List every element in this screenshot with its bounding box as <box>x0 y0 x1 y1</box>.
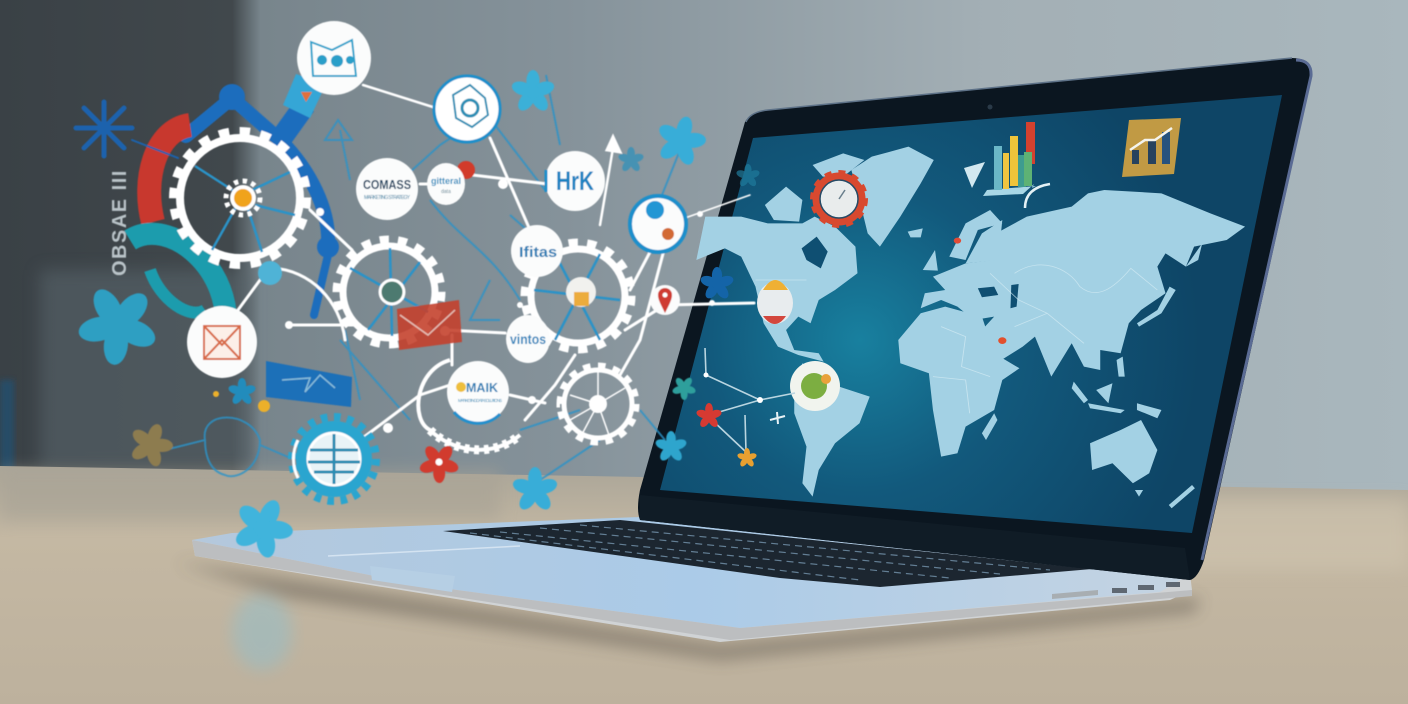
starburst gear <box>560 366 636 442</box>
New Zealand <box>1169 485 1195 508</box>
Scandinavia <box>949 210 1002 260</box>
envelope node <box>187 306 257 378</box>
small text node: data <box>441 189 451 195</box>
MAIK node: MAIK <box>466 380 499 395</box>
Black and Caspian seas <box>978 287 998 297</box>
white connector lines <box>238 85 754 440</box>
HrK node: HrK <box>556 166 594 196</box>
gold chart tile <box>1122 118 1181 177</box>
node near gear <box>258 261 282 285</box>
red node flower <box>695 403 723 429</box>
sun icon <box>226 181 260 215</box>
Eurasia <box>921 190 1245 377</box>
red flower <box>411 435 468 491</box>
world map <box>696 147 1245 508</box>
bar chart on screen <box>964 122 1050 208</box>
tan flower <box>122 416 180 473</box>
teal shape <box>130 234 226 335</box>
side ports <box>1052 582 1180 599</box>
North America <box>696 217 857 362</box>
Ifitas node <box>511 225 563 277</box>
Japan <box>1137 287 1176 327</box>
vintos node <box>506 315 550 363</box>
MAIK node: MARKETING DATA SOLUTIONS <box>458 398 502 403</box>
pin node <box>650 285 680 315</box>
dark blue arm with joints <box>186 91 332 315</box>
screen lid <box>638 58 1312 580</box>
keyboard-side flower <box>222 488 304 568</box>
borders <box>755 265 1157 413</box>
rotated wall text: OBSAE III <box>109 169 131 276</box>
small outline flower on screen <box>735 164 761 188</box>
hinge strip <box>640 495 1190 580</box>
wooden table <box>0 466 1408 704</box>
red map markers <box>954 238 961 244</box>
Africa <box>898 307 1019 457</box>
trackpad line <box>328 546 520 556</box>
Greenland <box>851 147 934 247</box>
MAIK node <box>447 361 509 423</box>
Arctic islands <box>765 187 802 222</box>
webcam <box>988 104 992 110</box>
screen network nodes <box>704 348 795 452</box>
medium left gear <box>337 240 441 344</box>
faint blue connector lines <box>165 75 680 480</box>
small white joints <box>285 179 715 433</box>
red card <box>397 300 462 350</box>
red clock gear on map <box>813 173 865 225</box>
rose emblem node <box>434 76 500 142</box>
dark blue flower on screen <box>699 267 735 301</box>
blue card <box>266 361 352 407</box>
Ifitas node: Ifitas <box>519 244 557 261</box>
Kamchatka <box>1186 243 1202 267</box>
background wall <box>0 0 1408 500</box>
Southeast Asia islands <box>1072 382 1088 403</box>
blue node flower <box>227 378 257 406</box>
medium right gear <box>525 243 631 349</box>
plane icon <box>770 412 785 424</box>
flower upper right <box>649 110 713 172</box>
screen <box>660 95 1282 533</box>
yellow dots <box>258 400 270 412</box>
Britain <box>923 250 938 271</box>
South America <box>794 363 870 497</box>
vintos node: vintos <box>510 331 546 347</box>
flag badge on map <box>757 280 793 324</box>
COMASS node: MARKETING STRATEGY <box>364 195 411 201</box>
flower top <box>510 70 556 114</box>
light blue bar with marker <box>283 74 326 118</box>
globe gear <box>292 417 376 501</box>
right teal flower <box>654 431 688 463</box>
small text node <box>427 163 465 205</box>
COMASS node: COMASS <box>363 177 411 192</box>
orange node star <box>737 448 757 468</box>
green badge on map <box>790 361 840 411</box>
blue snowflake <box>76 102 178 158</box>
network of gears and nodes <box>62 21 754 568</box>
keyboard <box>443 520 1092 587</box>
chat node <box>630 196 686 252</box>
COMASS node <box>356 158 418 220</box>
chart node <box>297 21 371 95</box>
teal tiny flower on bezel <box>667 371 701 405</box>
large teal flower <box>62 269 174 380</box>
HrK node <box>545 151 605 211</box>
large gear <box>174 132 306 264</box>
laptop deck <box>192 517 1190 628</box>
Madagascar <box>982 413 997 440</box>
Hudson Bay <box>802 237 828 268</box>
Baltic land filler <box>966 220 1002 263</box>
laptop base front edge <box>192 518 1192 642</box>
flowers <box>62 70 713 568</box>
Iceland <box>908 228 923 237</box>
bottom blue flower <box>511 467 559 513</box>
white flower centre <box>436 458 442 466</box>
small faded flower <box>617 147 645 173</box>
open gear behind MAIK <box>418 360 520 450</box>
red arc <box>149 125 190 222</box>
red dot <box>457 161 475 179</box>
small text node: gitteral <box>431 176 461 186</box>
Australia <box>1090 420 1157 483</box>
trackpad notch <box>370 566 455 592</box>
laptop <box>192 58 1312 642</box>
